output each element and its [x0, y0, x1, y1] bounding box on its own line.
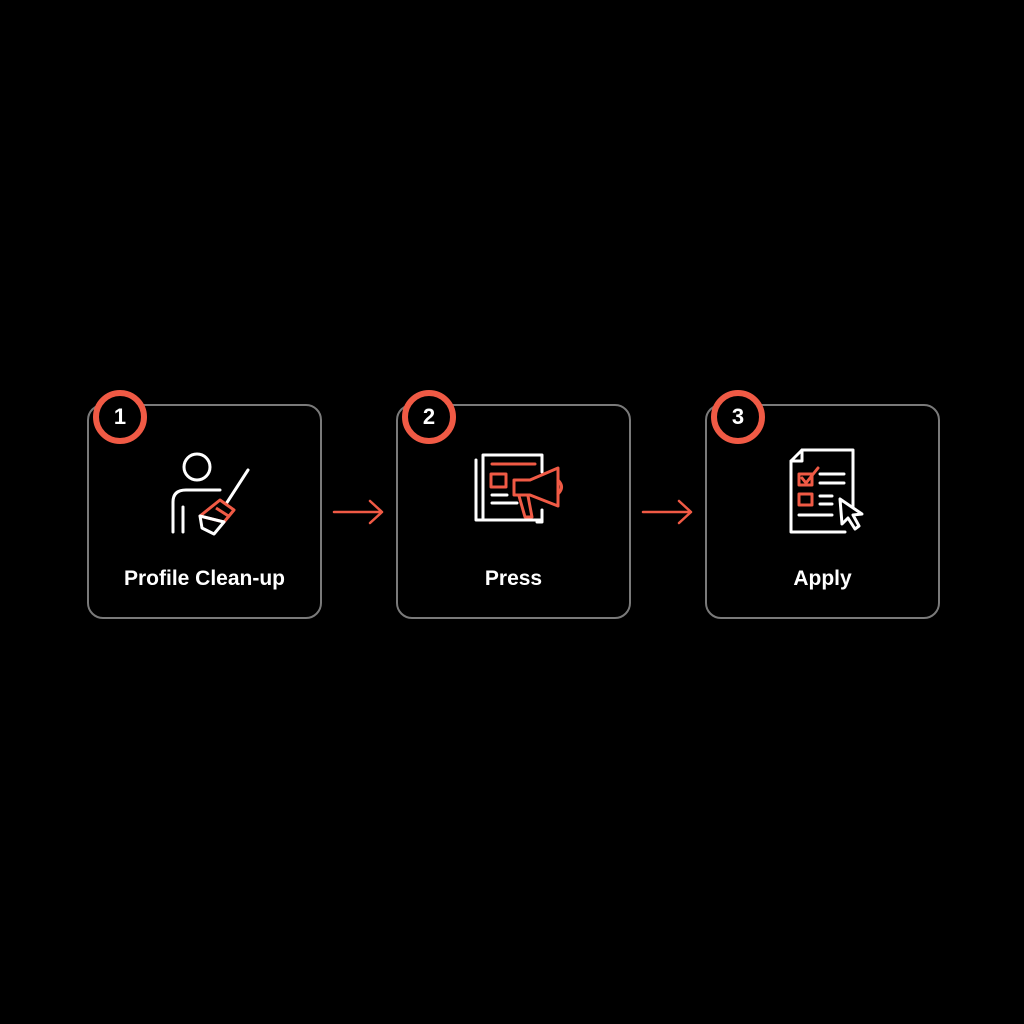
label: Profile Clean-up	[124, 567, 285, 590]
icon: person with broom	[172, 452, 250, 536]
icon: checklist with cursor	[790, 448, 864, 534]
card 2: Press	[396, 404, 631, 619]
badge 3	[711, 390, 765, 444]
label: Press	[485, 567, 542, 590]
label: Apply	[793, 567, 852, 590]
badge 2: 2	[423, 404, 435, 429]
badge 3: 3	[732, 404, 744, 429]
card 3: Apply	[705, 404, 940, 619]
card 1: Profile Clean-up	[87, 404, 322, 619]
badge 1: 1	[114, 404, 126, 429]
arrow 2	[642, 500, 692, 524]
badge 2	[402, 390, 456, 444]
badge 1	[93, 390, 147, 444]
icon: newspaper with megaphone	[474, 454, 564, 524]
arrow 1	[332, 500, 384, 524]
